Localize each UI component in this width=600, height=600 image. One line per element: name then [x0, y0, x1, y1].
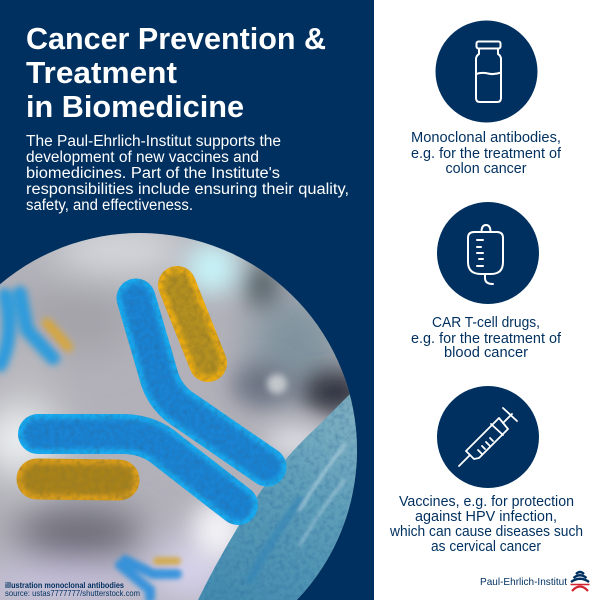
light orb [267, 374, 287, 394]
text: CAR T-cell drugs [411, 314, 562, 361]
icon: infusion bag [437, 202, 539, 304]
intro text block: responsibilities include ensuring their quality, [26, 181, 349, 198]
title: Cancer Prevention & [26, 21, 326, 56]
text: vaccines: which can cause diseases such [389, 523, 583, 540]
text: monoclonal antibodies: Monoclonal antibodies, [411, 129, 561, 146]
membrane streaks [250, 445, 345, 580]
antibody upper heavy arm [136, 298, 267, 467]
title: in Biomedicine [26, 89, 244, 124]
intro text block: The Paul-Ehrlich-Institut supports the [26, 133, 281, 150]
panel: white right background [374, 0, 600, 600]
blurred background antibody: bottom [120, 560, 177, 598]
intro text block: biomedicines. Part of the Institute's [26, 165, 280, 182]
blurred background antibody: left [0, 293, 68, 365]
text: vaccines: Vaccines, e.g. for protection [399, 493, 574, 510]
intro text block: development of new vaccines and [26, 149, 259, 166]
antibody upper light chain [177, 285, 208, 363]
membrane [198, 386, 358, 600]
text: monoclonal antibodies: e.g. for the treatment of [411, 145, 562, 162]
image credit: source: ustas7777777/shutterstock.com [5, 588, 140, 598]
text: CAR T-cell drugs: e.g. for the treatment of [411, 330, 562, 347]
text: CAR T-cell drugs: blood cancer [444, 344, 528, 361]
antibody lower light chain [37, 479, 119, 480]
text: vaccines: as cervical cancer [431, 538, 541, 555]
text: monoclonal antibodies: colon cancer [446, 160, 526, 177]
logo: Paul-Ehrlich-Institut [480, 572, 590, 591]
image credit [5, 580, 140, 598]
text: vaccines: against HPV infection, [415, 508, 557, 525]
text: monoclonal antibodies [411, 129, 562, 177]
logo: Paul-Ehrlich-Institut: Paul-Ehrlich-Institut [480, 576, 567, 588]
intro text block [26, 133, 349, 214]
intro text block: safety, and effectiveness. [26, 197, 193, 214]
icon: syringe [437, 386, 539, 488]
antibody lower heavy arm [38, 434, 238, 505]
image credit: illustration monoclonal antibodies [5, 580, 124, 590]
title: Treatment [26, 55, 177, 90]
text: CAR T-cell drugs: CAR T-cell drugs, [432, 314, 540, 331]
title [26, 21, 326, 124]
panel: navy left background [0, 0, 374, 600]
illustration: monoclonal antibodies in circle [0, 232, 369, 600]
icon: vial [436, 20, 538, 122]
text: vaccines [389, 493, 583, 555]
